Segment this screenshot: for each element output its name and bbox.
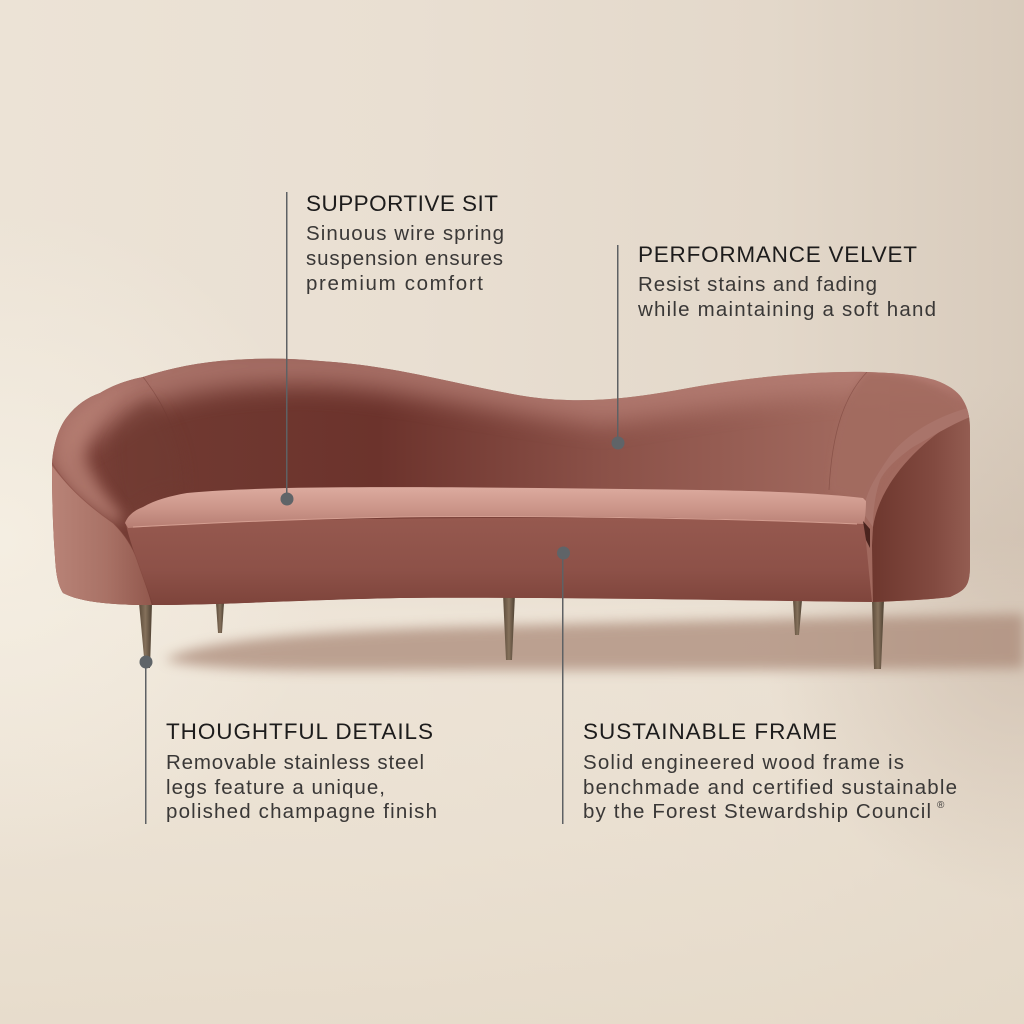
body text: [583, 751, 957, 823]
left arm outer face: [50, 463, 152, 610]
callout: performance velvet: [612, 242, 936, 450]
floor shadow under sofa: [165, 614, 1024, 671]
sofa: [40, 345, 980, 669]
sofa body: [40, 345, 980, 610]
seat welt seam: [133, 516, 857, 527]
leader line and dot: [557, 546, 570, 824]
backrest: [40, 350, 980, 610]
leader line and dot: [612, 245, 624, 450]
body text: [306, 222, 504, 295]
heading: PERFORMANCE VELVET: [638, 242, 917, 267]
body text: while maintaining a soft hand: [637, 298, 936, 321]
body text: Solid engineered wood frame is: [583, 751, 904, 774]
body text: by the Forest Stewardship Council: [583, 800, 931, 823]
body text: ®: [937, 800, 945, 811]
gap under seat tip: [863, 521, 870, 548]
body text: suspension ensures: [306, 247, 503, 270]
leader line and dot: [280, 192, 294, 506]
right arm outer face: [872, 414, 970, 602]
seat cushion: [125, 487, 866, 528]
callout: sustainable frame: [557, 546, 957, 824]
backrest top light: [52, 358, 954, 466]
left arm inner shade: [116, 400, 157, 434]
left arm seat joint: [52, 463, 152, 604]
seat front: [126, 518, 872, 605]
body text: polished champagne finish: [166, 800, 437, 823]
body text: [637, 273, 936, 321]
body text: legs feature a unique,: [166, 776, 385, 799]
body text: [166, 751, 437, 823]
body text: benchmade and certified sustainable: [583, 776, 957, 799]
body text: Sinuous wire spring: [306, 222, 504, 245]
body text: premium comfort: [306, 272, 483, 295]
sofa legs: [139, 594, 884, 669]
back seams: [143, 372, 867, 490]
heading: SUSTAINABLE FRAME: [583, 719, 837, 744]
body text: Resist stains and fading: [638, 273, 877, 296]
body text: Removable stainless steel: [166, 751, 424, 774]
left arm rim light: [52, 404, 126, 527]
callout: thoughtful details: [140, 656, 437, 824]
heading: SUPPORTIVE SIT: [306, 191, 498, 216]
right arm edge: [863, 408, 975, 527]
callout: supportive sit: [280, 191, 504, 506]
right arm inner: [857, 372, 933, 392]
heading: THOUGHTFUL DETAILS: [166, 719, 433, 744]
leader line and dot: [140, 656, 152, 824]
